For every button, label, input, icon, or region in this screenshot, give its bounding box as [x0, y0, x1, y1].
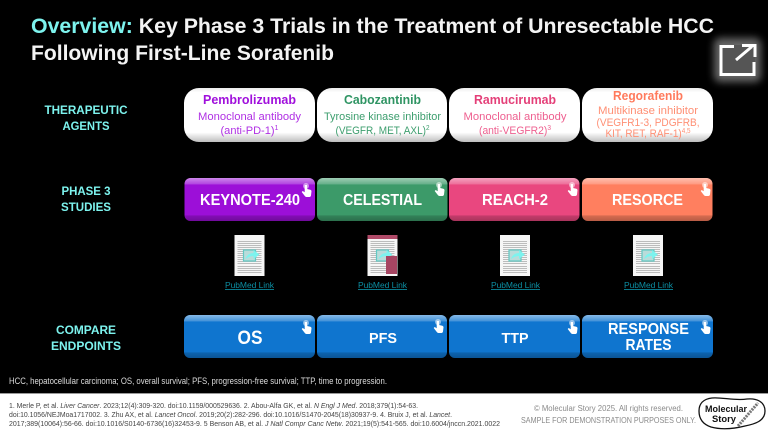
title — [31, 14, 714, 65]
row label: compare endpoints — [51, 323, 121, 353]
panel: regorafenib: 4,5 — [682, 128, 691, 135]
row label: phase 3 studies: STUDIES — [61, 200, 111, 214]
panel: ramucirumab: (anti-VEGFR2) — [479, 125, 552, 137]
copyright notice — [521, 404, 696, 425]
panel: cabozantinib: Cabozantinib — [344, 93, 421, 107]
button: pfs: PFS — [369, 330, 397, 347]
publication thumbnail: keynote-240 — [234, 235, 264, 276]
icon: external link — [714, 38, 761, 82]
references — [9, 401, 500, 428]
link: reach-2: PubMed Link — [491, 280, 541, 290]
panel: cabozantinib: Tyrosine kinase inhibitor — [324, 111, 441, 123]
references: doi:10.1056/NEJMoa1717002. 3. Zhu AX, et al. Lancet Oncol. 2019;20(2):282-296. doi:10.1016/S1470-2045(18)30937-9. 4. Bruix J, et al. Lancet. — [9, 410, 452, 419]
row label: therapeutic agents: AGENTS — [62, 119, 110, 133]
button: os: OS — [238, 327, 262, 349]
panel: pembrolizumab — [184, 88, 315, 142]
button: resorce: RESORCE — [612, 192, 683, 209]
panel: regorafenib: (VEGFR1-3, PDGFRB, — [596, 117, 700, 129]
button: celestial: CELESTIAL — [343, 192, 422, 209]
copyright notice: © Molecular Story 2025. All rights reserved. — [534, 404, 683, 413]
link: celestial: PubMed Link — [358, 280, 408, 290]
panel: ramucirumab: Ramucirumab — [474, 93, 556, 107]
panel: regorafenib — [582, 88, 713, 142]
panel: pembrolizumab: (anti-PD-1) — [220, 125, 274, 137]
logo: molecular story: Story — [712, 414, 737, 425]
row label: phase 3 studies — [61, 184, 111, 214]
panel: pembrolizumab: Monoclonal antibody — [198, 111, 302, 123]
title: Following First-Line Sorafenib — [31, 41, 334, 65]
row label: therapeutic agents — [44, 103, 128, 133]
button: pfs — [317, 315, 447, 358]
panel: pembrolizumab: Pembrolizumab — [203, 93, 296, 107]
panel: ramucirumab: 3 — [547, 125, 551, 132]
footer band — [0, 393, 768, 431]
title: Overview: Key Phase 3 Trials in the Treatment of Unresectable HCC — [31, 14, 714, 38]
button: keynote-240 — [184, 178, 315, 221]
button: reach-2 — [449, 178, 580, 221]
button: ttp — [449, 315, 580, 358]
row label: compare endpoints: COMPARE — [56, 323, 116, 337]
link: keynote-240: PubMed Link — [225, 280, 275, 290]
logo: molecular story — [699, 398, 765, 429]
copyright notice: SAMPLE FOR DEMONSTRATION PURPOSES ONLY. — [521, 416, 696, 425]
button: celestial — [317, 178, 448, 221]
abbreviations footnote: HCC, hepatocellular carcinoma; OS, overall survival; PFS, progression-free survival; TTP, time to progression. — [9, 376, 387, 386]
row label: compare endpoints: ENDPOINTS — [51, 339, 121, 353]
panel: ramucirumab — [449, 88, 580, 142]
panel: regorafenib: Regorafenib — [613, 89, 683, 103]
panel: regorafenib: KIT, RET, RAF-1) — [606, 128, 690, 140]
logo: molecular story: Molecular — [705, 404, 747, 415]
button: os — [184, 315, 315, 358]
panel: ramucirumab: Monoclonal antibody — [464, 111, 567, 123]
publication thumbnail: reach-2 — [500, 235, 530, 276]
button: resorce — [582, 178, 712, 221]
button: response rates — [582, 315, 713, 358]
publication thumbnail: celestial — [368, 235, 398, 276]
button: response rates: RATES — [626, 337, 672, 354]
button: keynote-240: KEYNOTE-240 — [200, 192, 300, 209]
panel: cabozantinib: (VEGFR, MET, AXL) — [336, 125, 435, 137]
button: reach-2: REACH-2 — [482, 192, 548, 209]
panel: cabozantinib — [317, 88, 447, 142]
link: resorce: PubMed Link — [624, 280, 674, 290]
references: 1. Merle P, et al. Liver Cancer. 2023;12(4):309-320. doi:10.1159/000529636. 2. Abou-Alfa GK, et al. N Engl J Med. 2018;379(1):54-63. — [9, 401, 418, 410]
button: ttp: TTP — [502, 330, 528, 347]
panel: pembrolizumab: 1 — [275, 125, 279, 132]
references: 2017;389(10064):56-66. doi:10.1016/S0140-6736(16)32453-9. 5 Benson AB, et al. J Natl Compr Canc Netw. 2021;19(5):541-565. doi:10.6004/jnccn.2021.0022 — [9, 419, 500, 428]
panel: cabozantinib: 2 — [426, 125, 430, 132]
button: response rates: RESPONSE — [608, 321, 689, 338]
row label: phase 3 studies: PHASE 3 — [62, 184, 111, 198]
panel: regorafenib: Multikinase inhibitor — [598, 105, 698, 117]
row label: therapeutic agents: THERAPEUTIC — [44, 103, 128, 117]
publication thumbnail: resorce — [633, 235, 663, 276]
